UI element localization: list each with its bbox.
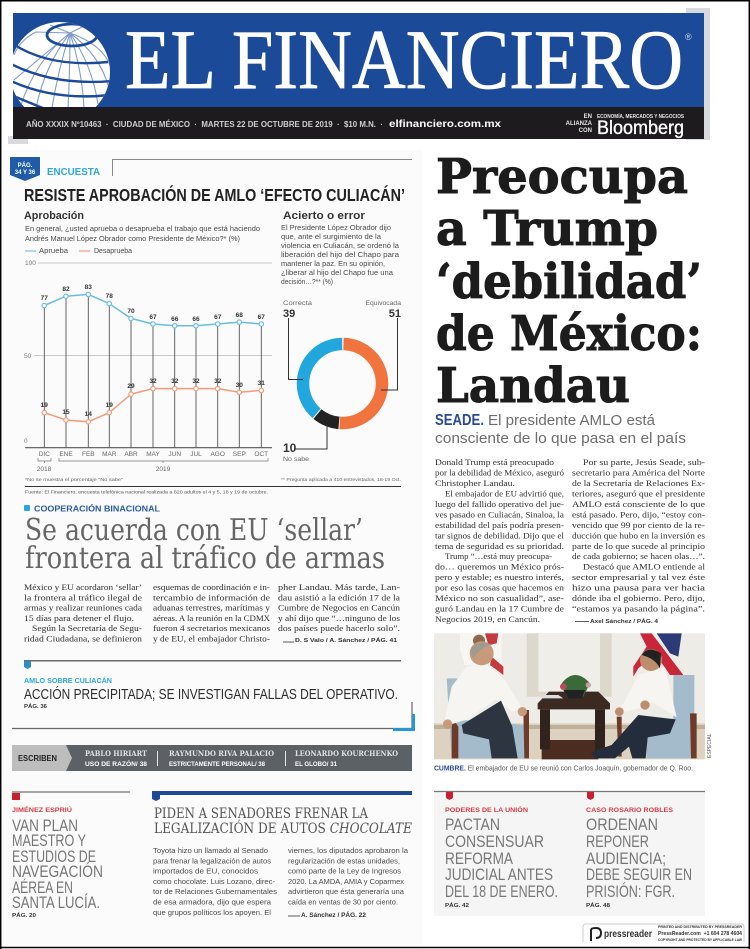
article text: aduanas terrestres, marítimas y: [153, 603, 271, 613]
article text: esquemas de coordinación e in-: [153, 582, 270, 592]
subheadline: El presidente AMLO está: [488, 412, 656, 429]
lead byline: [575, 618, 659, 625]
headline: MAESTRO Y: [12, 831, 86, 850]
story: autos chocolate: [152, 791, 412, 919]
story: Poderes de la Unión: PÁG. 42: [445, 902, 469, 909]
Bloomberg alliance: EN: [584, 114, 592, 120]
lead article text: Destacó que AMLO entiende al: [583, 562, 706, 572]
pressreader badge: [583, 924, 744, 942]
chart legend: [25, 248, 132, 255]
line chart: 50: [24, 353, 32, 360]
pressreader badge: PRINTED AND DISTRIBUTED BY PRESSREADER: [658, 924, 742, 929]
lead article text: de cada gobierno; se hacen olas…”.: [572, 551, 705, 561]
lead article text: Trump “…está muy preocupa-: [445, 551, 552, 561]
line chart: OCT: [254, 451, 268, 458]
line chart: 78: [106, 293, 113, 300]
donut description: ¿liberar al hijo del Chapo fue una: [281, 270, 393, 277]
lead article text: por la debilidad de México, aseguró: [435, 468, 564, 478]
article text: y ahí dijo que “…ninguno de los: [278, 613, 401, 623]
article text: regularización de estas unidades,: [288, 858, 400, 865]
headline: Se acuerda con EU ‘sellar’: [25, 513, 363, 548]
icon: pressreader logo: [591, 928, 601, 941]
photo credit: ESPECIAL: [707, 733, 713, 758]
headline: NAVEGACIÓN: [12, 862, 103, 881]
photo caption: CUMBRE. El embajador de EU se reunió con Carlos Joaquín, gobernador de Q. Roo.: [434, 766, 693, 772]
lead article text: pero y estable; es nuestro interés,: [435, 572, 564, 582]
lead article text: Donald Trump está preocupado: [435, 457, 554, 467]
masthead: [8, 8, 710, 144]
donut chart: [283, 300, 401, 463]
article text: advirtieron que ésta generaría una: [288, 889, 404, 896]
line chart: 32: [214, 378, 222, 385]
headline: SANTA LUCÍA.: [12, 893, 100, 912]
article text: armas y realizar reuniones cada: [24, 603, 142, 613]
subheading: Aprobación: Aprobación: [24, 210, 84, 222]
line chart: 32: [192, 378, 200, 385]
chart description: Andrés Manuel López Obrador como Presidente de México?* (%): [25, 236, 240, 243]
article text: aéreas. A la reunión en la CDMX: [153, 613, 271, 623]
page badge: 34 Y 36: [15, 170, 36, 176]
story: Caso Rosario Robles: [586, 792, 692, 909]
story: Poderes de la Unión: JUDICIAL ANTES: [445, 865, 553, 884]
byline: D. S Valo / A. Sánchez / PÁG. 41: [295, 637, 397, 644]
lead article text: está pasado. Pero, dijo, “estoy con-: [572, 509, 705, 519]
article text: como parte de la Ley de Ingresos: [288, 869, 402, 876]
story: Caso Rosario Robles: DEBE SEGUIR EN: [586, 865, 692, 884]
page reference: PÁG. 36: [24, 703, 47, 710]
lead article text: vencido que 99 por ciento de la re-: [572, 520, 705, 530]
story: Jiménez Espriú: PÁG. 20: [12, 912, 36, 919]
headline: VAN PLAN: [12, 816, 78, 835]
line chart: SEP: [233, 451, 246, 458]
lead article text: teriores, aseguró que el presidente: [572, 488, 705, 498]
article text: Cumbre de Negocios en Cancún: [278, 603, 401, 613]
lead article text: dónde iba el gobierno. Pero, dijo,: [572, 593, 705, 603]
pressreader badge: pressreader: [604, 928, 652, 940]
columnist: Hiriart: [85, 749, 148, 768]
story: Poderes de la Unión: CONSENSUAR: [445, 832, 544, 851]
donut description: mantener la paz. En su opinión,: [281, 261, 385, 268]
article text: pher Landau. Más tarde, Lan-: [278, 582, 400, 592]
section label: ENCUESTA: [47, 167, 100, 178]
subheadline: consciente de lo que pasa en el país: [435, 430, 686, 447]
story: Poderes de la Unión: PACTAN: [445, 815, 500, 834]
headline: [154, 806, 412, 837]
chart description: [25, 226, 260, 243]
lead article text: sector empresarial y tal vez éste: [572, 572, 705, 582]
line chart: 70: [127, 308, 135, 315]
lead byline: Axel Sánchez / PÁG. 4: [590, 618, 659, 625]
subheading: Acierto o error: Acierto o error: [283, 210, 366, 222]
lead headline: Preocupa: [436, 149, 688, 205]
footnotes: ** Pregunta aplicada a 410 entrevistados, 18-19 Oct.: [281, 477, 401, 483]
donut chart: 10: [283, 441, 297, 455]
story: Caso Rosario Robles: REPONER: [586, 832, 649, 851]
panel: cooperación binacional: [24, 504, 401, 644]
edition line: AÑO XXXIX Nº10463 · CIUDAD DE MÉXICO · MARTES 22 DE OCTUBRE DE 2019 · $10 M.N. ·: [26, 120, 383, 129]
line chart: 66: [171, 316, 179, 323]
line chart: 19: [106, 402, 113, 409]
byline: [288, 912, 367, 919]
donut chart: No sabe: [283, 456, 309, 463]
columnist: Riva Palacio: ESTRICTAMENTE PERSONAL/ 38: [169, 761, 265, 768]
lead article text: Por su parte, Jesús Seade, sub-: [583, 457, 705, 467]
line chart: MAR: [102, 451, 117, 458]
lead article text: tema de seguridad es su prioridad.: [435, 541, 564, 551]
line chart: 30: [236, 382, 243, 389]
line chart: 14: [85, 411, 92, 418]
pressreader badge: PressReader.com +1 604 278 4604: [658, 931, 742, 937]
article text: [24, 582, 401, 644]
chart description: En general, ¿usted aprueba o desaprueba el trabajo que está haciendo: [25, 226, 260, 233]
article text: tor de Relaciones Gubernamentales: [153, 889, 278, 896]
footnotes: [25, 477, 401, 483]
kicker: COOPERACIÓN BINACIONAL: [34, 504, 160, 514]
lead article text: Christopher Landau.: [435, 478, 515, 488]
article text: Según la Secretaría de Segu-: [32, 623, 142, 633]
website: elfinanciero.com.mx: [389, 119, 502, 130]
lead article text: AMLO está consciente de lo que: [572, 499, 705, 509]
article text: dau asistió a la edición 17 de la: [278, 592, 400, 602]
article text: 15 días para detener el flujo.: [24, 613, 134, 623]
lead article text: estabilidad del país podría presen-: [435, 520, 564, 530]
lead headline: a Trump: [436, 201, 658, 257]
panel: bottom stories: [434, 792, 705, 916]
lead headline: de México:: [436, 306, 702, 362]
lead article text: secretario para América del Norte: [572, 468, 705, 478]
Bloomberg alliance: ALIANZA: [566, 121, 593, 127]
line chart: 100: [25, 260, 36, 267]
story: Caso Rosario Robles: PÁG. 48: [586, 902, 610, 909]
article text: fueron 4 secretarios mexicanos: [153, 623, 271, 633]
donut description: violencia en Culiacán, se ordenó la: [281, 243, 399, 250]
article text: como chocolate. Luis Lozano, direc-: [153, 879, 276, 886]
headline: frontera al tráfico de armas: [25, 541, 385, 576]
Bloomberg alliance: Bloomberg: [597, 118, 684, 139]
lead article text: luego del fallido operativo del jue-: [435, 499, 564, 509]
line chart: FEB: [82, 451, 95, 458]
story: Poderes de la Unión: REFORMA: [445, 849, 514, 868]
article text: que grupos políticos los apoyen. El: [153, 910, 271, 917]
panel: AMLO sobre Culiacán: [12, 660, 414, 730]
columnist: Hiriart: USO DE RAZÓN/ 38: [85, 759, 147, 768]
story: Caso Rosario Robles: CASO ROSARIO ROBLES: [586, 807, 673, 814]
lead article text: por eso las cosas que hacemos en: [435, 583, 565, 593]
source: Fuente: El Financiero, encuesta telefónica nacional realizada a 820 adultos el 4 y 5, 18 y 19 de octubre.: [25, 490, 268, 496]
headline: AÉREA EN: [12, 878, 73, 897]
story: Poderes de la Unión: PODERES DE LA UNIÓN: [445, 805, 528, 814]
line chart: 32: [171, 378, 179, 385]
article text: y de EU, el embajador Christo-: [153, 634, 270, 644]
chart legend: Desaprueba: [94, 248, 132, 255]
lead article text: do… queremos un México prós-: [435, 562, 564, 572]
columnist: Kourchenko: EL GLOBO/ 31: [295, 761, 337, 768]
line chart: 77: [41, 295, 48, 302]
donut chart: Equivocada: [365, 300, 401, 307]
article text: caída en ventas de 30 por ciento.: [288, 900, 398, 906]
photo: Landau and Joaquín: [434, 633, 705, 759]
line chart: 31: [258, 380, 265, 387]
donut description: que, ante el surgimiento de la: [281, 234, 381, 241]
line chart: 32: [149, 378, 157, 385]
columnist: Kourchenko: [295, 749, 398, 768]
line chart: 67: [258, 314, 265, 321]
article text: ridad Ciudadana, se definieron: [24, 634, 143, 644]
line chart: [24, 260, 272, 473]
headline: ESTUDIOS DE: [12, 847, 96, 866]
footnotes: *No se muestra el porcentaje "No sabe": [25, 477, 123, 483]
line chart: 2019: [156, 466, 171, 473]
article text: [153, 848, 408, 917]
article text: importados de EU, conocidos: [153, 869, 259, 876]
page badge: [10, 157, 40, 181]
lead article text: México no son casualidad”, ase-: [435, 593, 564, 603]
line chart: 66: [192, 316, 200, 323]
line chart: 0: [24, 438, 28, 445]
columnist: Riva Palacio: [169, 749, 274, 768]
line chart: 29: [127, 383, 135, 390]
byline: [283, 637, 397, 644]
lead article text: guró Landau en la 17 Cumbre de: [435, 604, 564, 614]
line chart: DIC: [39, 451, 50, 458]
line chart: 15: [62, 409, 70, 416]
donut description: [281, 225, 399, 286]
heading: RESISTE APROBACIÓN DE AMLO ‘EFECTO CULIACÁN’: [24, 184, 405, 205]
lead article text: ves pasado en Culiacán, Sinaloa, la: [435, 509, 564, 519]
registered mark: ®: [685, 32, 692, 42]
story: Caso Rosario Robles: ORDENAN: [586, 815, 658, 834]
article text: de esa armadora, dijo que espera: [153, 900, 271, 906]
story: Caso Rosario Robles: PRISIÓN: FGR.: [586, 882, 675, 901]
article text: México y EU acordaron ‘sellar’: [24, 582, 142, 592]
lead article text: [435, 457, 706, 624]
headline: LEGALIZACIÓN DE AUTOS CHOCOLATE: [154, 819, 412, 837]
line chart: JUL: [190, 451, 202, 458]
line chart: 2018: [37, 466, 52, 473]
lead headline: [436, 149, 702, 414]
story: Poderes de la Unión: DEL 18 DE ENERO.: [445, 882, 558, 901]
kicker: AMLO SOBRE CULIACÁN: [24, 676, 112, 685]
columnist: Riva Palacio: RAYMUNDO RIVA PALACIO: [169, 749, 274, 758]
columnist: Kourchenko: LEONARDO KOURCHENKO: [295, 749, 398, 758]
Bloomberg alliance: ECONOMÍA, MERCADOS Y NEGOCIOS: [597, 112, 685, 120]
article text: tercambio de información de: [153, 592, 270, 602]
line chart: ABR: [124, 451, 138, 458]
article text: la frontera al tráfico ilegal de: [24, 592, 142, 602]
title: El Financiero: EL FINANCIERO: [125, 13, 683, 107]
lead headline: ‘debilidad’: [436, 254, 702, 310]
story: Caso Rosario Robles: AUDIENCIA;: [586, 849, 666, 868]
lead article text: tar signos de debilidad. Dijo que el: [435, 530, 565, 540]
headline: [25, 513, 385, 576]
icon: globe: [13, 22, 110, 107]
chart legend: Aprueba: [39, 248, 68, 255]
article text: Toyota hizo un llamado al Senado: [153, 848, 268, 855]
line chart: JUN: [168, 451, 181, 458]
line chart: ENE: [59, 451, 73, 458]
donut chart: 51: [389, 308, 401, 320]
story: Poderes de la Unión: [445, 792, 558, 909]
line chart: 67: [214, 314, 222, 321]
band: escriben: ESCRIBEN: [18, 754, 57, 763]
Bloomberg alliance: [566, 112, 685, 139]
subheadline: SEADE.: [435, 412, 484, 429]
article text: para frenar la legalización de autos: [153, 858, 272, 865]
donut chart: 39: [283, 308, 295, 320]
story: Jiménez Espriú: [12, 792, 130, 919]
article text: viernes, los diputados aprobaron la: [288, 848, 408, 855]
line chart: 67: [149, 314, 157, 321]
donut description: El Presidente López Obrador dijo: [281, 225, 391, 232]
band: escriben: [12, 745, 412, 771]
headline: ACCIÓN PRECIPITADA; SE INVESTIGAN FALLAS DEL OPERATIVO.: [24, 686, 398, 703]
headline: [12, 816, 103, 912]
lead article text: ducción que hubo en la inversión es: [572, 530, 706, 540]
line chart: 83: [85, 284, 92, 291]
lead article text: parte de lo que sucede al principio: [572, 541, 705, 551]
donut description: decisión…?** (%): [281, 279, 333, 286]
story: Jiménez Espriú: JIMÉNEZ ESPRIÚ: [12, 805, 72, 814]
lead article text: hizo una pausa para ver hacia: [572, 583, 705, 593]
columnist: Hiriart: PABLO HIRIART: [85, 749, 148, 758]
page badge: PÁG.: [18, 162, 33, 169]
lead article text: “estamos ya pasando la página”.: [572, 604, 705, 614]
lead article text: Negocios 2019, en Cancún.: [435, 614, 540, 624]
panel: encuesta: [10, 157, 412, 496]
donut description: liberación del hijo del Chapo para: [281, 252, 399, 259]
Bloomberg alliance: CON: [579, 128, 592, 134]
line chart: 82: [62, 286, 70, 293]
donut chart: Correcta: [283, 300, 312, 307]
subheadline: [435, 412, 686, 447]
article text: dos países puede hacerlo solo”.: [278, 623, 400, 633]
lead headline: Landau: [436, 358, 630, 414]
line chart: AGO: [210, 451, 225, 458]
line chart: 19: [41, 402, 48, 409]
line chart: 68: [236, 312, 243, 319]
headline: PIDEN A SENADORES FRENAR LA: [154, 806, 369, 822]
lead article text: de la Secretaría de Relaciones Ex-: [572, 478, 705, 488]
article text: 2020. La AMDA, AMIA y Coparmex: [288, 879, 405, 886]
line chart: MAY: [146, 451, 160, 458]
byline: A. Sánchez / PÁG. 22: [301, 912, 367, 919]
lead article text: El embajador de EU advirtió que,: [445, 488, 564, 498]
